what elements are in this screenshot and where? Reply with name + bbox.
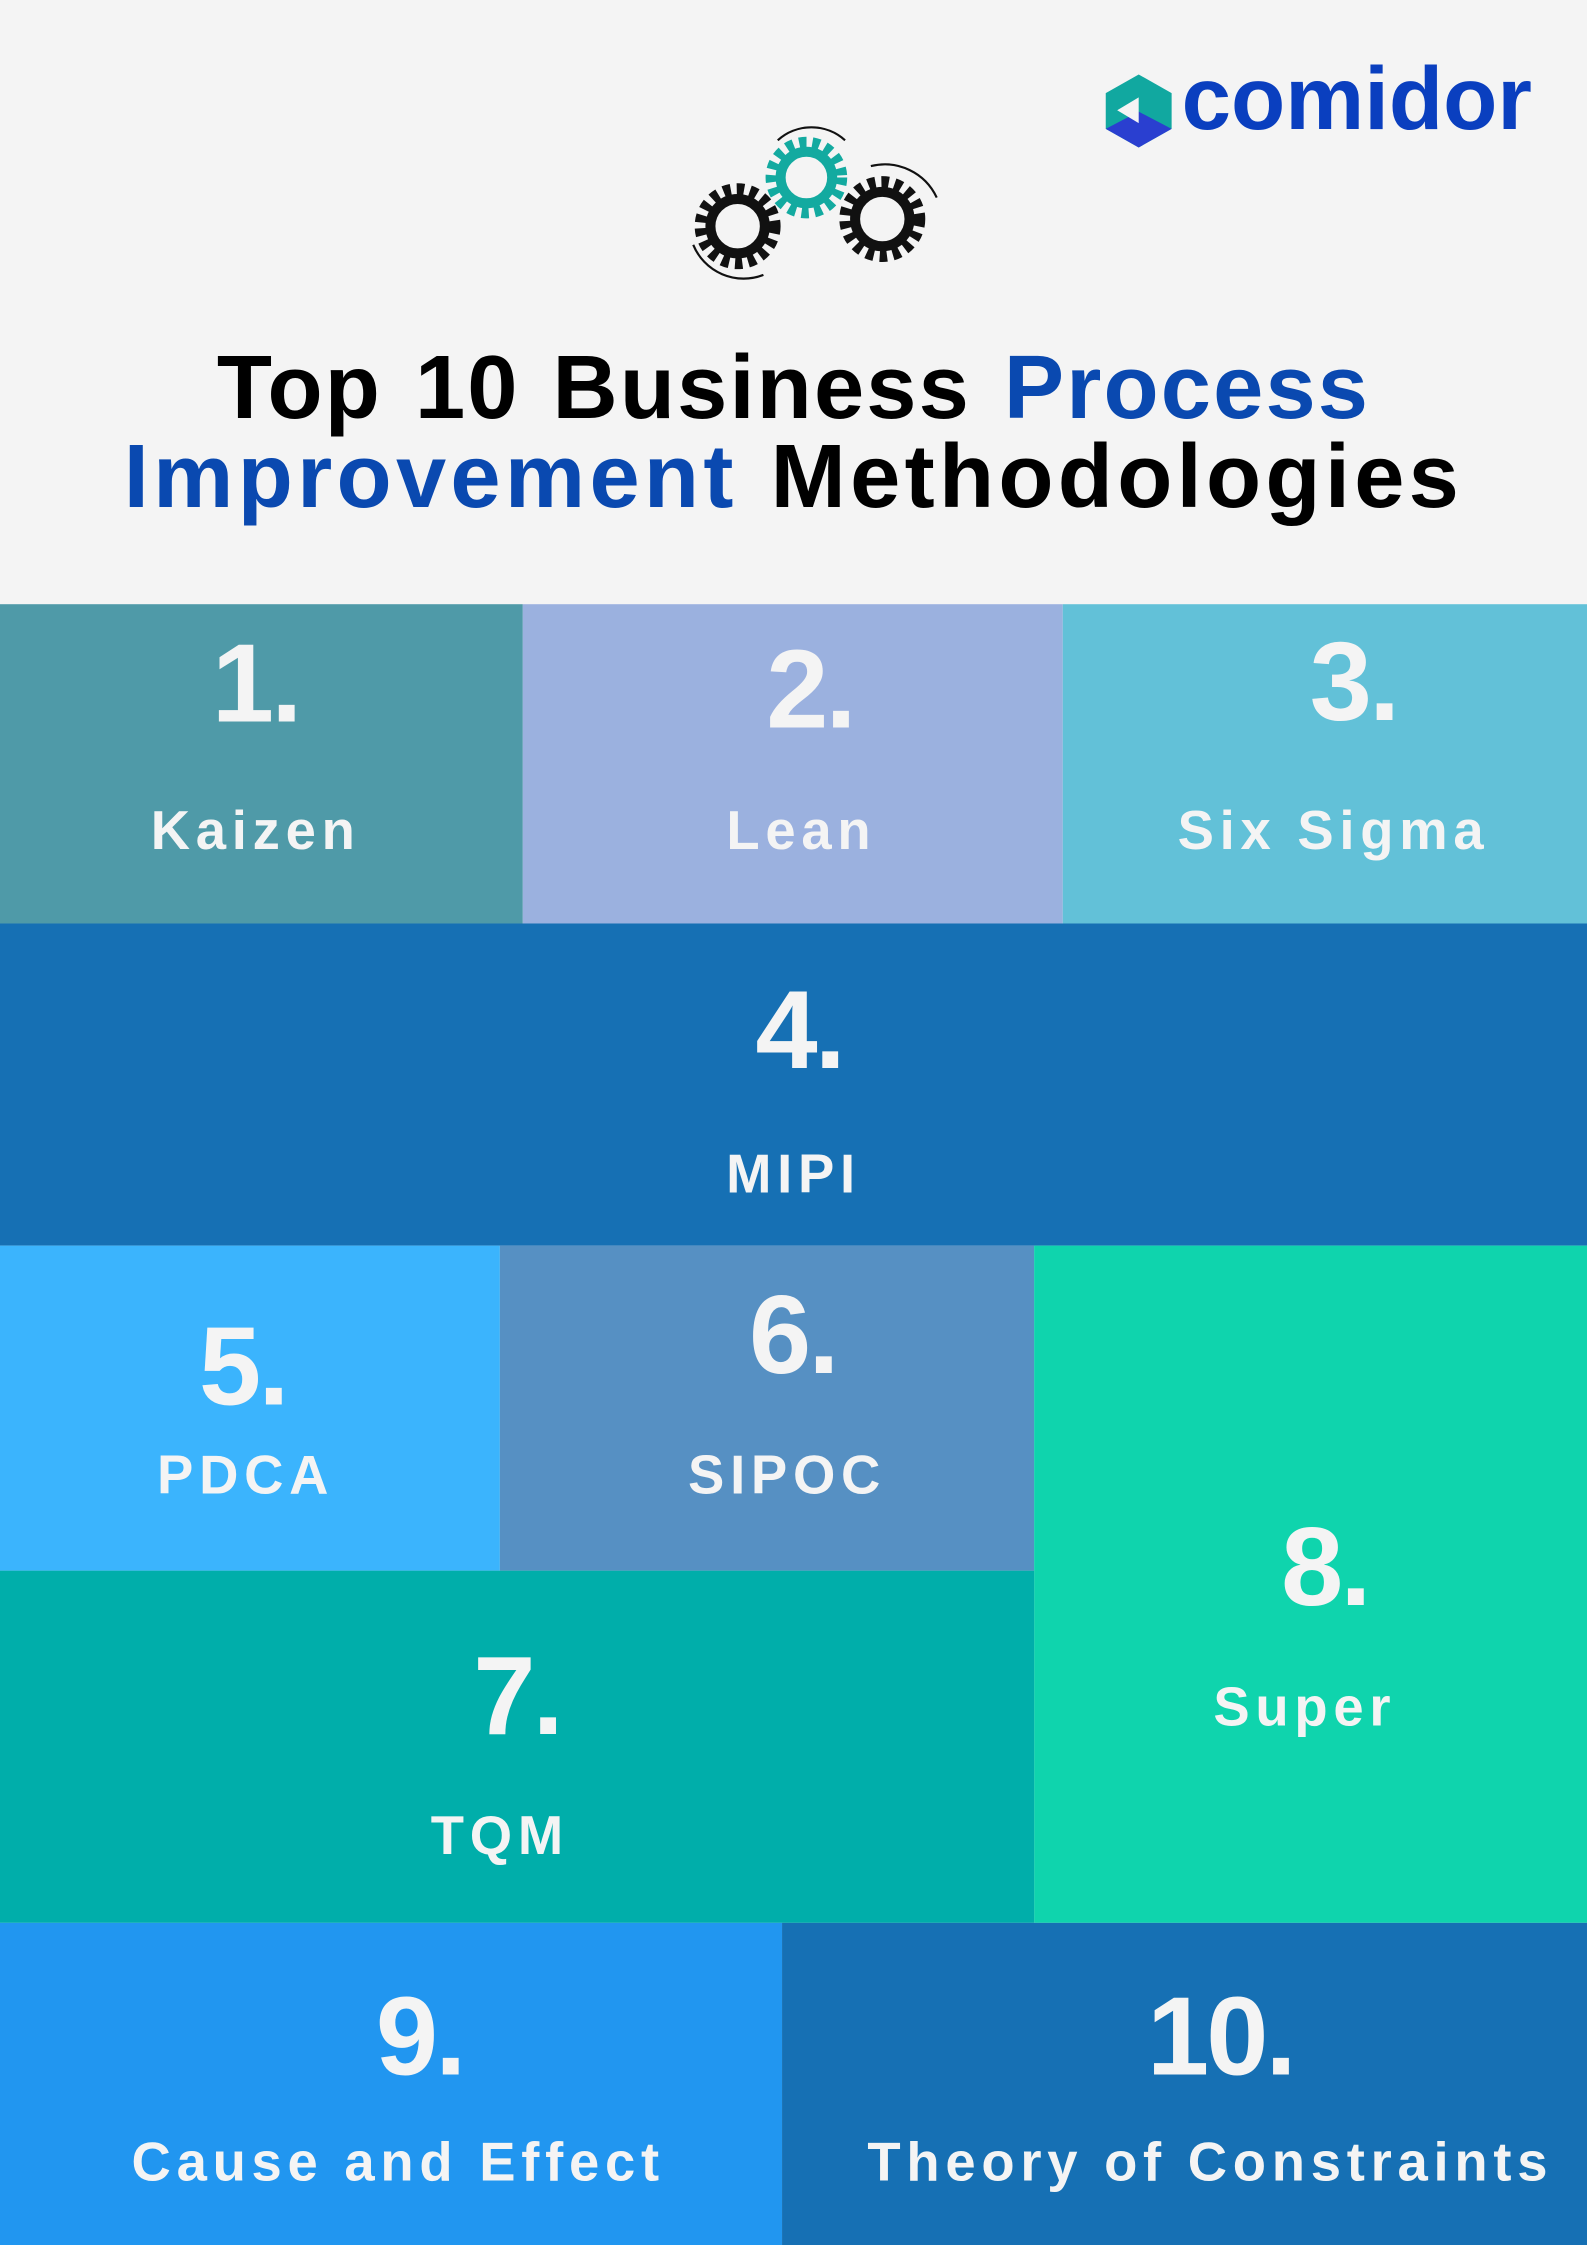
panel: 5 PDCA xyxy=(0,1246,500,1571)
panel: 4 MIPI: 4. xyxy=(755,966,843,1092)
panel: 7 TQM: TQM xyxy=(431,1807,569,1867)
panel: 5 PDCA: PDCA xyxy=(157,1446,334,1506)
title: Improvement Methodologies xyxy=(124,427,1463,527)
panel: 5 PDCA: 5. xyxy=(199,1303,287,1429)
panel: 3 Six Sigma xyxy=(1063,604,1587,923)
logo xyxy=(1106,50,1532,149)
panel: 10 Theory of Constraints: Theory of Constraints xyxy=(867,2133,1553,2193)
panel: 9 Cause and Effect: Cause and Effect xyxy=(132,2133,665,2193)
panel: 6 SIPOC: 6. xyxy=(749,1271,837,1397)
panel: 2 Lean xyxy=(523,604,1063,923)
icon: gears xyxy=(692,126,938,280)
panel: 6 SIPOC xyxy=(500,1246,1034,1571)
panel: 7 TQM xyxy=(0,1571,1034,1923)
panel: 4 MIPI: MIPI xyxy=(726,1145,861,1206)
logo text: comidor xyxy=(1182,50,1532,149)
panel: 2 Lean: 2. xyxy=(766,626,854,752)
icon: logo mark xyxy=(1106,74,1172,148)
title: Top 10 Business Process xyxy=(217,338,1370,438)
panel: 8 Super: 8. xyxy=(1281,1503,1369,1629)
panel: 1 Kaizen: 1. xyxy=(212,620,299,746)
panel: 2 Lean: Lean xyxy=(726,802,876,862)
panel: 10 Theory of Constraints: 10. xyxy=(1147,1973,1294,2099)
panel: 8 Super: Super xyxy=(1213,1678,1396,1738)
title xyxy=(124,338,1463,527)
panel: 4 MIPI xyxy=(0,923,1587,1246)
panel: 7 TQM: 7. xyxy=(473,1632,561,1758)
panel: 1 Kaizen: Kaizen xyxy=(151,802,361,862)
panel: 1 Kaizen xyxy=(0,604,523,923)
panel: 9 Cause and Effect: 9. xyxy=(376,1973,463,2099)
panel: 10 Theory of Constraints xyxy=(782,1923,1587,2245)
panel: 6 SIPOC: SIPOC xyxy=(688,1446,886,1506)
panel: 9 Cause and Effect xyxy=(0,1923,782,2245)
panel: 8 Super xyxy=(1034,1246,1587,1923)
panel: 3 Six Sigma: 3. xyxy=(1310,619,1397,745)
panel: 3 Six Sigma: Six Sigma xyxy=(1178,802,1489,862)
